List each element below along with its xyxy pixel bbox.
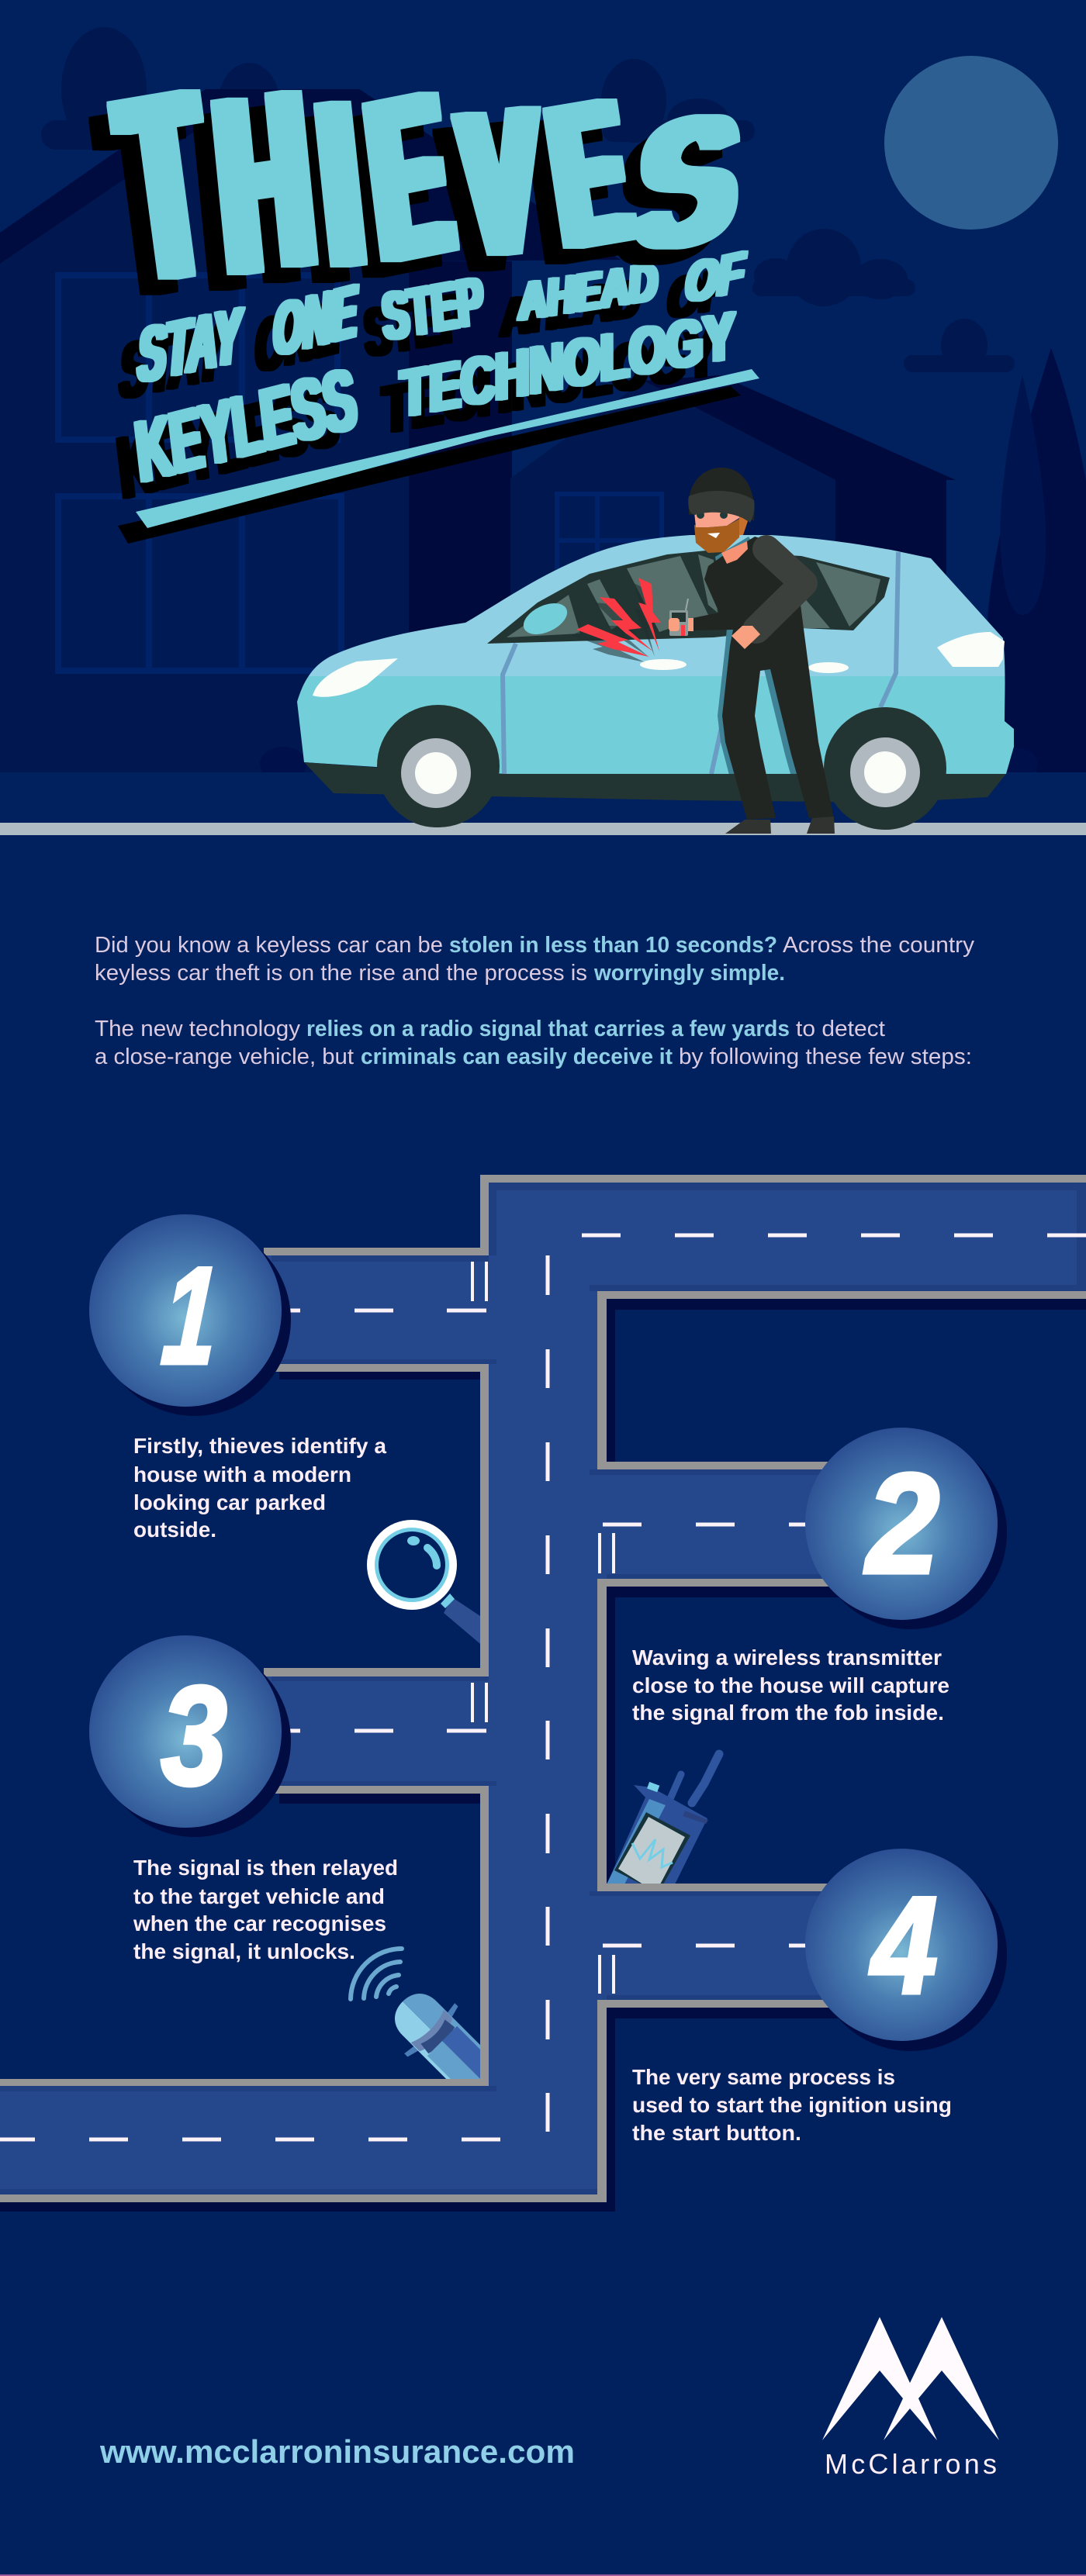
- skirt: [304, 762, 1006, 803]
- window frame: [487, 551, 890, 644]
- step 3 badge: [89, 1635, 291, 1837]
- intro line 1: [95, 933, 975, 958]
- step 1 text: [133, 1434, 386, 1542]
- subtitle: OF: [682, 239, 749, 316]
- subtitle: [131, 239, 749, 501]
- step 2 badge: 2: [864, 1445, 939, 1604]
- subtitle: STEP: [380, 262, 486, 355]
- door handles: [640, 659, 687, 670]
- step 3 text: [133, 1856, 398, 1963]
- step 2 badge: [805, 1428, 1007, 1629]
- step 4 badge: [805, 1849, 1007, 2051]
- step 2 text: close to the house will capture: [632, 1673, 949, 1697]
- step 3 text: when the car recognises: [133, 1911, 386, 1935]
- headlight: [313, 658, 398, 697]
- bushes: [260, 747, 1038, 781]
- intro line 2: keyless car theft is on the rise and the process is: [95, 961, 587, 986]
- intro line 1: stolen in less than 10 seconds?: [449, 933, 777, 958]
- thief: [669, 468, 835, 834]
- road edge bands: [0, 1183, 1086, 2194]
- fist: [731, 626, 760, 649]
- rear wheel: [824, 707, 946, 830]
- face: [694, 512, 743, 527]
- step 1 text: Firstly, thieves identify a: [133, 1434, 386, 1458]
- tree: [987, 348, 1086, 772]
- main word THIEVES: V: [457, 64, 544, 300]
- road surface: [0, 1183, 1086, 2194]
- eyes: [697, 511, 728, 519]
- icon: car with wireless signal: [348, 1946, 480, 2079]
- intro line 3: [95, 1017, 885, 1041]
- lane markings: [0, 1235, 1086, 2139]
- intro line 4: by following these few steps:: [679, 1045, 972, 1069]
- main word THIEVES: H: [207, 38, 322, 327]
- intro text: [95, 933, 975, 1069]
- signal arcs: [351, 1949, 402, 1999]
- step 2 text: [632, 1645, 949, 1725]
- text: AHEAD: [517, 251, 659, 332]
- car body: [287, 527, 1024, 777]
- intro line 4: [95, 1045, 972, 1069]
- logo: McClarrons: [822, 2317, 999, 2480]
- step 3 text: the signal, it unlocks.: [133, 1939, 355, 1963]
- step 1 badge: [89, 1214, 291, 1416]
- main word THIEVES: [108, 36, 744, 338]
- rear door handle: [808, 662, 849, 673]
- window panes: [507, 554, 880, 637]
- icon: wireless transmitter: [607, 1754, 719, 1884]
- main word THIEVES: T: [108, 36, 223, 338]
- hat band: [688, 491, 755, 523]
- pavement stripe: [0, 823, 1086, 835]
- step 4 text: [632, 2065, 952, 2145]
- sleeve: [756, 549, 804, 630]
- clouds: [41, 27, 1015, 372]
- thief shadow on car: [715, 537, 797, 774]
- neck: [721, 541, 748, 564]
- red lightning bolts: [572, 578, 661, 662]
- step 2 text: Waving a wireless transmitter: [632, 1645, 942, 1670]
- road kerbs: [0, 1175, 1086, 2202]
- main word THIEVES: S: [631, 70, 744, 293]
- road network: [0, 1175, 1086, 2212]
- intro line 3: to detect: [796, 1017, 885, 1041]
- step 3 text: to the target vehicle and: [133, 1884, 385, 1908]
- step 1 badge: 1: [158, 1238, 223, 1393]
- moon: [884, 56, 1058, 230]
- bottom edge line: [0, 2574, 1086, 2576]
- main word THIEVES: E: [358, 45, 460, 309]
- rear light: [937, 632, 1005, 667]
- night scene background: [0, 27, 1086, 835]
- logo mark: [822, 2317, 999, 2440]
- car: [287, 527, 1024, 830]
- front wheel: [377, 705, 500, 827]
- intro line 1: Did you know a keyless car can be: [95, 933, 443, 958]
- step 4 text: the start button.: [632, 2121, 801, 2145]
- title: [108, 36, 759, 544]
- intro line 4: a close-range vehicle, but: [95, 1045, 354, 1069]
- ear: [739, 516, 748, 535]
- underline swoosh: [136, 369, 759, 528]
- step 3 text: The signal is then relayed: [133, 1856, 398, 1880]
- beard: [694, 518, 741, 553]
- large house: [0, 89, 621, 772]
- thief body and legs: [693, 537, 834, 820]
- road shadows: [0, 1299, 1086, 2212]
- subtitle: STAY: [135, 291, 245, 400]
- icon: magnifying glass: [367, 1520, 485, 1648]
- door seams: [503, 552, 898, 774]
- underline swoosh shadow: [118, 386, 741, 544]
- step 1 text: house with a modern: [133, 1462, 351, 1487]
- ground: [0, 772, 1086, 823]
- website url: www.mcclarroninsurance.com: [99, 2433, 575, 2470]
- step 4 text: The very same process is: [632, 2065, 895, 2089]
- intro line 3: relies on a radio signal that carries a few yards: [306, 1017, 790, 1041]
- subtitle: ONE: [271, 268, 360, 373]
- top-down car: [395, 1994, 480, 2079]
- logo wordmark: McClarrons: [825, 2448, 997, 2480]
- small house: [510, 375, 956, 772]
- step 3 badge: 3: [161, 1657, 227, 1815]
- intro line 2: worryingly simple.: [593, 961, 785, 986]
- step 4 badge: 4: [870, 1869, 938, 2023]
- step 4 text: used to start the ignition using: [632, 2093, 952, 2117]
- main word THIEVES: I: [310, 53, 371, 316]
- step 1 text: looking car parked: [133, 1490, 326, 1514]
- intro line 1: Across the country: [783, 933, 975, 958]
- intro line 4: criminals can easily deceive it: [361, 1045, 673, 1069]
- mirror: [519, 597, 572, 641]
- step 1 text: outside.: [133, 1518, 216, 1542]
- hat: [689, 468, 754, 521]
- transmitter in hand: [669, 599, 693, 636]
- intro line 3: The new technology: [95, 1017, 301, 1041]
- step 2 text: the signal from the fob inside.: [632, 1701, 944, 1725]
- main word THIEVES: E: [539, 57, 640, 290]
- shoes: [725, 817, 835, 834]
- teeth: [707, 533, 720, 538]
